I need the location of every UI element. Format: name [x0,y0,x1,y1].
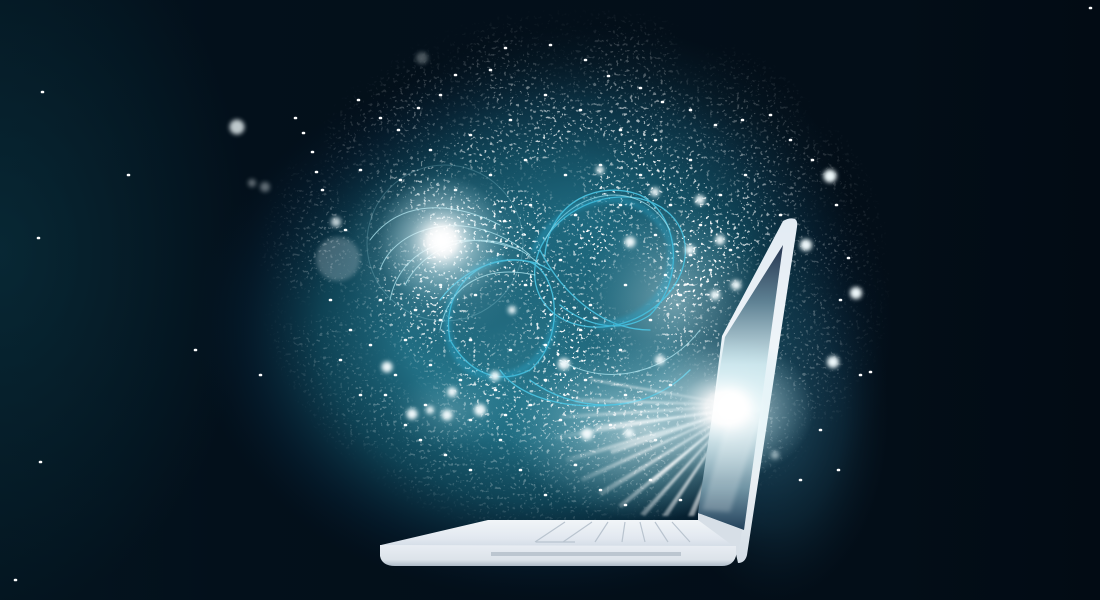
light rays from screen [555,378,735,516]
right side glow behind lid [660,230,890,600]
grey lens orb [316,237,360,281]
soft bokeh orbs [230,52,862,459]
dense speckle particles [264,14,880,522]
teal nebula glow [195,60,895,600]
laptop screen [698,245,783,530]
laptop front side [380,545,736,566]
laptop lid back edge [700,218,797,563]
keyboard keys [535,522,690,542]
laptop keyboard deck [381,520,736,553]
laptop hinge [698,513,742,556]
optical drive slot [491,552,681,556]
laptop [380,218,797,566]
screen flare [635,336,815,512]
star flare left [376,175,508,307]
cyan swirl light trails [367,165,707,406]
left edge glow [0,0,420,600]
pale haze near laptop [340,160,780,520]
upper teal nebula glow [330,25,850,405]
